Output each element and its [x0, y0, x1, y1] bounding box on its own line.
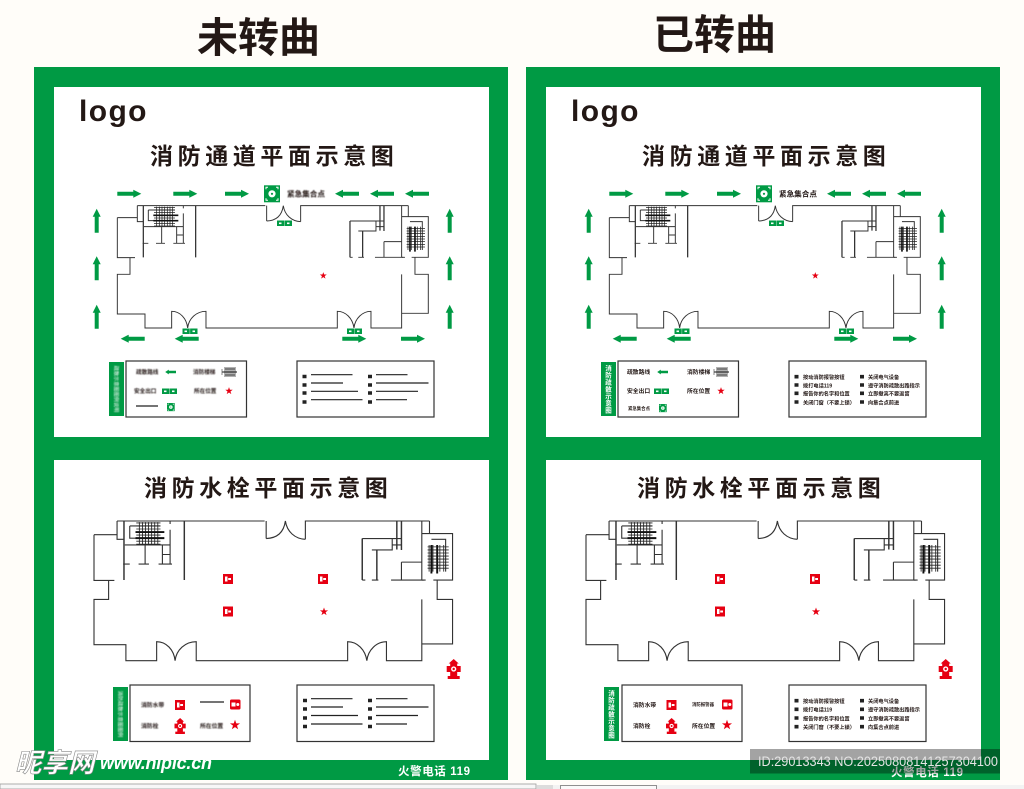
legend box lower right: 消防水带: [633, 701, 656, 709]
instruction list lower right: 立即撤离不要逗留: [868, 714, 910, 722]
legend box right: 消防楼梯: [687, 368, 710, 376]
evacuation arrows left: [93, 190, 454, 343]
legend box left: [126, 361, 246, 417]
legend bar lower right: 图: [608, 732, 615, 740]
instruction list right: 遵守消防疏散出路指示: [868, 381, 920, 389]
legend bar lower right: 散: [608, 710, 615, 718]
legend box lower left: 消防栓: [141, 722, 159, 730]
legend bar right: 示: [605, 392, 612, 400]
floor plan: evacuation right: [609, 206, 920, 328]
legend bar right: 防: [605, 370, 612, 380]
panel: left green sign: [34, 67, 508, 780]
instruction list lower right: 按动消防报警按钮: [803, 697, 845, 705]
evacuation arrows right: [585, 190, 946, 343]
logo right: logo: [571, 95, 640, 128]
legend box lower left: 所在位置: [200, 722, 223, 730]
markers: hydrant boxes, star left: [223, 574, 461, 679]
legend bar right: 散: [605, 384, 612, 394]
legend bar right: 消: [605, 364, 612, 372]
heading: 未转曲: 未转曲: [197, 15, 320, 61]
title: evacuation plan right: 消防通道平面示意图: [642, 143, 890, 169]
instruction list lower right: 关闭门窗（不要上锁）: [803, 723, 855, 731]
legend bar lower right: 疏: [608, 702, 615, 712]
legend box left: 消防楼梯: [193, 368, 216, 376]
panel: right green sign: [526, 67, 1000, 780]
instruction list right: 拨打电话119: [803, 381, 832, 389]
instruction list lower right: [789, 685, 926, 742]
watermark: nipic logo: www.nipic.cn: [100, 753, 212, 773]
heading: 已转曲: 已转曲: [653, 12, 776, 58]
legend box right: 疏散路线: [627, 368, 650, 376]
floor plan: evacuation left: [117, 206, 428, 328]
instruction list right: 报告你的名字和位置: [803, 390, 850, 398]
legend bar right: [601, 362, 616, 416]
bottom viewer bar: [0, 784, 1024, 789]
legend box left: 所在位置: [194, 387, 217, 395]
legend box lower right: 消防报警器: [692, 701, 715, 708]
instruction list right: 按动消防报警按钮: [803, 373, 845, 381]
legend box lower right: 消防栓: [633, 722, 651, 730]
markers: exits, star and assembly point right: [674, 185, 854, 334]
legend box lower left: [130, 685, 250, 742]
legend bar right: 图: [605, 406, 612, 414]
watermark: ID strip: ID:29013343 NO:20250808141257304100: [758, 754, 998, 769]
floor plan: hydrant right: [586, 521, 945, 661]
assembly label right: 紧急集合点: [779, 188, 817, 198]
legend box right: 所在位置: [687, 387, 710, 395]
legend bar lower right: 防: [608, 696, 615, 704]
legend bar lower right: [604, 687, 619, 741]
legend bar lower left: [113, 687, 128, 741]
instruction list right: 立即撤离不要逗留: [868, 390, 910, 398]
instruction list lower right: 遵守消防疏散出路指示: [868, 706, 920, 714]
legend box lower right: 所在位置: [692, 722, 715, 730]
instruction box left (lines): [297, 361, 434, 417]
legend bar lower right: 意: [608, 724, 615, 732]
legend bar right: 意: [605, 398, 612, 408]
instruction list lower right: 关闭电气设备: [868, 697, 900, 705]
instruction list lower right: 向集合点前进: [868, 723, 900, 731]
watermark: nipic logo: 昵享网: [15, 748, 98, 778]
assembly label left: 紧急集合点: [287, 188, 325, 198]
markers: exits, star and assembly point left: [182, 185, 362, 334]
legend bar lower right: 消: [608, 688, 615, 698]
legend bar lower left: 消防疏散示意图图例: [116, 691, 124, 737]
instruction list right: 关闭门窗（不要上锁）: [803, 398, 855, 406]
instruction list right: [789, 361, 926, 417]
legend bar lower right: 示: [608, 718, 615, 726]
legend box left: 疏散路线: [136, 368, 159, 376]
title: hydrant plan left: 消防水栓平面示意图: [144, 475, 392, 501]
fire phone left: 火警电话 119: [398, 764, 470, 778]
legend bar right: 疏: [605, 378, 612, 386]
logo left: logo: [79, 95, 148, 128]
fire phone right: 火警电话 119: [891, 765, 963, 779]
legend box right: [618, 361, 738, 417]
floor plan: hydrant left: [94, 521, 453, 661]
legend box lower left: 消防水带: [141, 701, 164, 709]
instruction list lower right: 拨打电话119: [803, 706, 832, 714]
legend box right: 紧急集合点: [628, 405, 651, 412]
title: hydrant plan right: 消防水栓平面示意图: [637, 475, 885, 501]
instruction list right: 向集合点前进: [868, 398, 900, 406]
legend bar left: [109, 362, 124, 416]
legend box right: 安全出口: [627, 387, 650, 395]
legend box left: 安全出口: [134, 387, 157, 395]
instruction list lower right: 报告你的名字和位置: [803, 714, 850, 722]
legend bar left: 疏散示意图图例说明: [112, 366, 120, 412]
legend box lower right: [622, 685, 742, 742]
title: evacuation plan left: 消防通道平面示意图: [150, 143, 398, 169]
watermark: ID strip: [750, 749, 1000, 774]
instruction box lower left (lines): [297, 685, 434, 742]
instruction list right: 关闭电气设备: [868, 373, 900, 381]
watermark: nipic logo: [15, 748, 212, 778]
markers: hydrant boxes, star right: [715, 574, 953, 679]
